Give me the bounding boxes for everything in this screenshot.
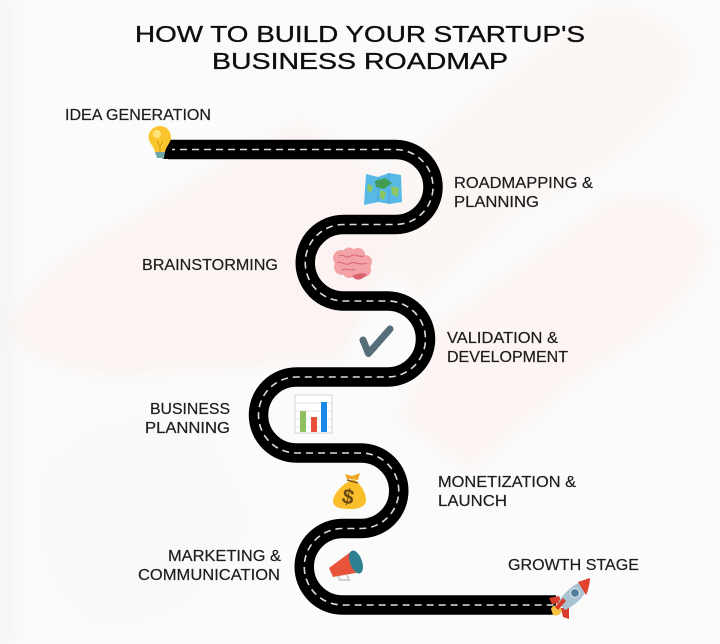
icon: bar chart <box>295 395 332 433</box>
label: business planning: PLANNING <box>145 420 230 437</box>
label: business planning <box>145 401 230 437</box>
label: roadmapping and planning: PLANNING <box>454 194 539 211</box>
icon: rocket <box>549 578 590 619</box>
icon: megaphone <box>329 549 366 580</box>
label: validation and development <box>447 330 569 366</box>
label: marketing and communication: MARKETING & <box>168 548 282 565</box>
icon: map <box>364 173 402 205</box>
title <box>135 21 585 74</box>
label: roadmapping and planning: ROADMAPPING & <box>454 175 594 192</box>
label: monetization and launch: MONETIZATION & <box>438 474 577 491</box>
label: growth stage: GROWTH STAGE <box>508 557 639 574</box>
label: business planning: BUSINESS <box>150 401 230 418</box>
icon: check mark <box>363 329 390 354</box>
label: marketing and communication: COMMUNICATION <box>138 567 280 584</box>
title: HOW TO BUILD YOUR STARTUP'S <box>135 21 585 47</box>
label: idea generation: IDEA GENERATION <box>65 107 211 124</box>
label: marketing and communication <box>138 548 282 584</box>
icon: brain <box>333 248 372 280</box>
label: validation and development: DEVELOPMENT <box>447 349 569 366</box>
label: brainstorming: BRAINSTORMING <box>142 257 278 274</box>
label: roadmapping and planning <box>454 175 594 211</box>
label: monetization and launch <box>438 474 577 510</box>
label: validation and development: VALIDATION & <box>447 330 559 347</box>
label: monetization and launch: LAUNCH <box>438 493 507 510</box>
title: BUSINESS ROADMAP <box>212 48 508 74</box>
icon: money bag <box>333 473 366 510</box>
icon: money bag: $ <box>340 485 356 510</box>
winding road <box>168 150 556 605</box>
icon: light bulb <box>148 126 172 159</box>
